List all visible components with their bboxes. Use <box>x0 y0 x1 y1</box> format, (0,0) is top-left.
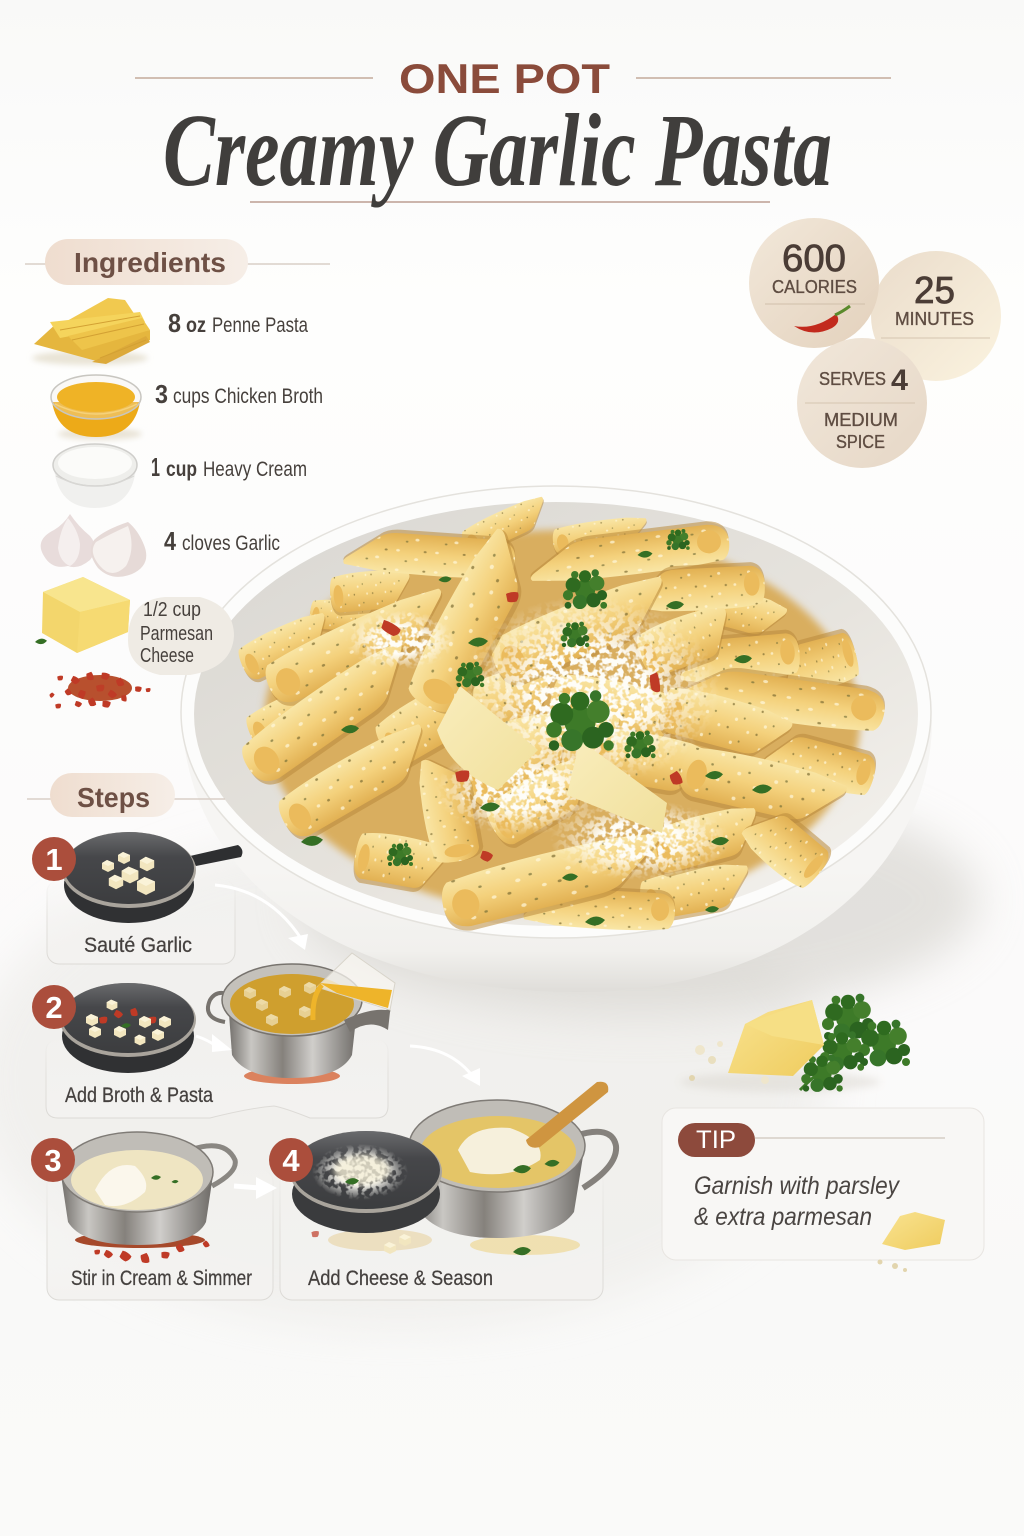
ingredient: broth text <box>155 379 323 409</box>
arrow 1 to 2 <box>215 885 308 950</box>
pasta bowl <box>181 486 932 992</box>
badge: minutes: 25 <box>914 270 955 312</box>
tip pill: TIP <box>696 1126 736 1154</box>
icon: garlic <box>41 514 146 577</box>
icon: chili flakes <box>49 671 151 709</box>
icon: cream bowl <box>53 444 137 508</box>
tip text <box>694 1172 900 1231</box>
badge: minutes: MINUTES <box>895 309 974 329</box>
badge: calories <box>749 218 879 348</box>
steps heading: Steps <box>77 782 150 813</box>
ingredient: garlic text: cloves Garlic <box>182 532 280 555</box>
icon: pan <box>60 983 196 1073</box>
arrow 2 to pot <box>196 1034 232 1052</box>
arrow 2 to 4 <box>410 1046 480 1086</box>
tip text: Garnish with parsley <box>694 1172 900 1200</box>
ingredient: broth text: 3 <box>155 379 168 409</box>
ingredients heading <box>25 239 330 285</box>
ingredient: parmesan text: Cheese <box>140 645 194 667</box>
badge 3: 3 <box>44 1143 62 1178</box>
badge 2: 2 <box>45 990 63 1025</box>
arrow 3 to 4 <box>234 1177 277 1199</box>
badge: calories: CALORIES <box>772 277 857 297</box>
ingredient: penne text <box>168 308 308 338</box>
ingredient: parmesan text: Parmesan <box>140 623 213 645</box>
ingredient: penne text: Penne Pasta <box>212 314 308 337</box>
garnish: parmesan and parsley <box>680 994 910 1092</box>
parmesan shavings <box>345 595 730 880</box>
bowl body <box>181 486 932 992</box>
step 2 card <box>32 953 395 1118</box>
badge: serves and spice: SPICE <box>836 432 885 452</box>
step 3 card <box>31 1132 273 1300</box>
ingredient: penne text: oz <box>186 314 206 337</box>
icon: measuring jug pouring <box>313 953 395 1020</box>
tip pill <box>678 1123 755 1157</box>
icon: pan with cheese <box>290 1131 442 1233</box>
ingredient: parmesan text <box>128 597 234 675</box>
badge 4 <box>269 1138 313 1182</box>
tip card <box>662 1108 984 1272</box>
badge: serves and spice <box>797 338 927 468</box>
step 4 card <box>269 1082 616 1300</box>
icon: pot with broth <box>208 964 390 1084</box>
label: Add Cheese & Season <box>308 1267 493 1290</box>
icon: pan with garlic <box>62 832 242 923</box>
badge: serves and spice: 4 <box>891 364 908 397</box>
ingredient list <box>32 298 323 709</box>
badge 1: 1 <box>45 842 63 877</box>
ingredient: garlic text <box>164 526 280 556</box>
badge: calories: 600 <box>782 238 846 280</box>
label: Add Broth & Pasta <box>65 1084 213 1107</box>
ingredient: penne text: 8 <box>168 308 181 338</box>
bowl shadow <box>300 785 980 1015</box>
badge: serves and spice: MEDIUM <box>824 410 898 430</box>
spilled crumbs <box>311 1229 580 1255</box>
badge 4: 4 <box>282 1143 300 1178</box>
step 1 card <box>32 832 242 964</box>
icon: cheese crumbs <box>878 1212 945 1272</box>
label: Sauté Garlic <box>84 934 192 957</box>
badge 1 <box>32 837 76 881</box>
stat badges <box>749 218 1001 468</box>
tip text: & extra parmesan <box>694 1203 872 1231</box>
icon: parmesan block <box>35 577 130 653</box>
icon: chili <box>794 306 850 333</box>
parmesan wedges <box>437 686 667 833</box>
steps heading <box>27 773 225 817</box>
label: Stir in Cream & Simmer <box>71 1267 252 1290</box>
icon: pot with cream <box>61 1132 235 1248</box>
chili flakes <box>94 1240 210 1264</box>
badge 2 <box>32 985 76 1029</box>
ingredient: cream text: Heavy Cream <box>203 458 307 481</box>
ingredient: cream text <box>151 452 307 482</box>
icon: pot with sauce and spoon <box>409 1082 616 1238</box>
icon: penne <box>32 298 150 365</box>
parsley and chili flakes <box>301 529 772 926</box>
ingredient: cream text: cup <box>166 458 197 481</box>
badge 3 <box>31 1138 75 1182</box>
ingredients heading: Ingredients <box>74 247 226 278</box>
ingredient: cream text: 1 <box>151 452 160 482</box>
badge: serves and spice: SERVES <box>819 369 886 389</box>
badge: minutes <box>871 251 1001 381</box>
pasta pile <box>234 493 888 936</box>
ingredient: parmesan text: 1/2 cup <box>143 599 201 621</box>
title block <box>135 55 891 208</box>
ingredient: broth text: cups Chicken Broth <box>173 385 323 408</box>
icon: broth bowl <box>51 375 142 440</box>
ingredient: garlic text: 4 <box>164 526 176 556</box>
heading: one pot: ONE POT <box>399 55 610 102</box>
